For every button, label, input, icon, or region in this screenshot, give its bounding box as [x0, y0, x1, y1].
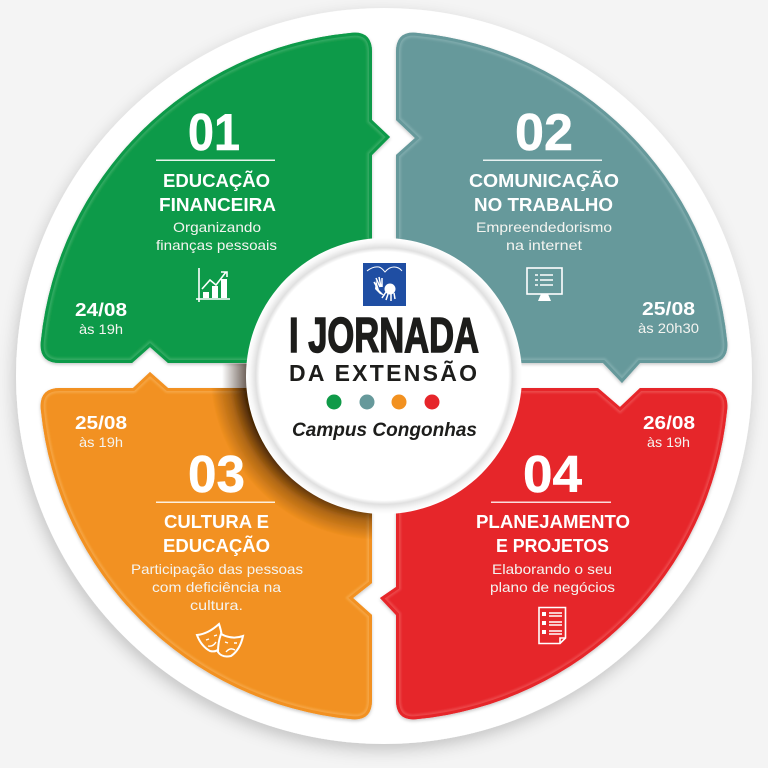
four coloured dots: [326, 394, 440, 410]
description 04: Elaborando o seu: [492, 561, 612, 577]
date 04: [643, 413, 695, 450]
description 03: Participação das pessoas: [131, 561, 303, 577]
panel 01: green: [41, 33, 390, 363]
number 01: 01: [188, 104, 240, 162]
panel 04: red: [380, 388, 727, 719]
icon: monitor: [527, 268, 562, 301]
shadow patch in left gap: [222, 364, 250, 388]
green panel shape: [41, 33, 390, 363]
description 01: Organizando: [173, 219, 261, 235]
divider 03: [156, 502, 275, 503]
heading 03: CULTURA E: [164, 512, 269, 532]
description 03: cultura.: [190, 597, 243, 613]
date 01: às 19h: [79, 321, 123, 337]
heading 02: [469, 170, 619, 215]
date 03: [75, 413, 127, 450]
date 02: [638, 299, 699, 336]
heading 03: EDUCAÇÃO: [163, 535, 270, 556]
number 04: 04: [523, 446, 582, 504]
campus name: Campus Congonhas: [292, 420, 477, 441]
title: I Jornada: I JORNADA: [289, 309, 479, 363]
divider 01: [156, 160, 275, 161]
description 02: na internet: [506, 237, 582, 253]
description 03: [131, 561, 303, 613]
description 01: [156, 219, 277, 253]
icon: checklist document: [539, 608, 566, 644]
heading 01: [159, 170, 276, 215]
date 04: às 19h: [647, 434, 690, 450]
number 03: 03: [188, 446, 245, 504]
description 02: Empreendedorismo: [476, 219, 612, 235]
date 03: 25/08: [75, 413, 127, 433]
number 02: 02: [515, 104, 573, 162]
divider 04: [491, 502, 611, 503]
orange panel shape: [39, 372, 374, 722]
central badge: [246, 238, 522, 514]
description 04: plano de negócios: [490, 579, 615, 595]
heading 01: EDUCAÇÃO: [163, 170, 270, 191]
description 02: [476, 219, 612, 253]
date 03: às 19h: [79, 434, 123, 450]
heading 02: NO TRABALHO: [474, 195, 613, 215]
panel 03: orange: [39, 372, 374, 722]
badge disc: [246, 238, 522, 514]
icon: theatre masks: [197, 624, 243, 656]
heading 04: [476, 512, 630, 556]
description 03: com deficiência na: [152, 579, 281, 595]
panel 02: teal: [396, 33, 727, 383]
description 01: finanças pessoais: [156, 237, 277, 253]
date 04: 26/08: [643, 413, 695, 433]
date 01: [75, 300, 127, 337]
divider 02: [483, 160, 602, 161]
heading 04: E PROJETOS: [496, 536, 609, 556]
heading 04: PLANEJAMENTO: [476, 512, 630, 532]
subtitle: da Extensão: DA EXTENSÃO: [289, 359, 477, 386]
icon: growth chart: [196, 268, 230, 302]
heading 01: FINANCEIRA: [159, 195, 276, 215]
date 01: 24/08: [75, 300, 127, 320]
description 04: [490, 561, 615, 595]
heading 02: COMUNICAÇÃO: [469, 170, 619, 191]
date 02: às 20h30: [638, 320, 699, 336]
icon: sign language: [363, 263, 406, 306]
teal panel shape: [396, 33, 727, 383]
red panel shape: [380, 388, 727, 719]
heading 03: [163, 512, 270, 556]
date 02: 25/08: [642, 299, 695, 319]
